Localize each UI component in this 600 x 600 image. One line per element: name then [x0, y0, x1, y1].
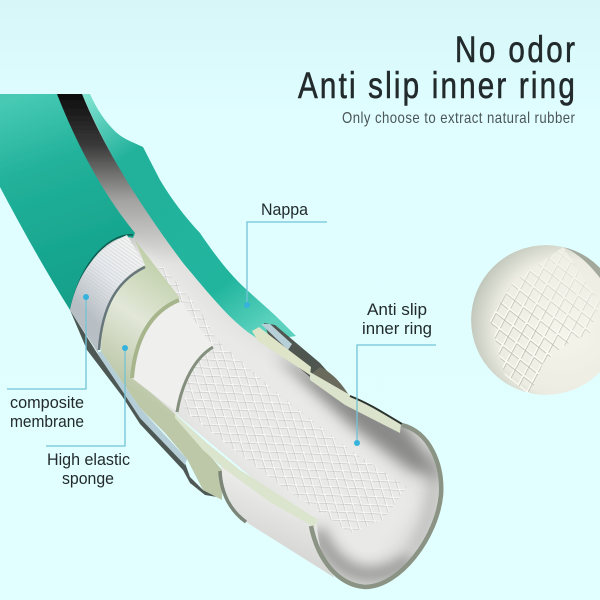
membrane cut rim — [99, 267, 145, 350]
anchor dot — [122, 345, 128, 351]
leader line — [247, 222, 327, 305]
sphere base — [471, 245, 600, 395]
callout: composite membrane — [7, 294, 89, 431]
label line 1: High elastic — [47, 450, 130, 469]
title block — [298, 30, 575, 107]
label line 1: Anti slip — [367, 300, 427, 319]
inner surface shading — [120, 240, 445, 575]
patch highlight fade — [504, 247, 600, 342]
front nappa teal band — [0, 94, 135, 310]
tube inner surface — [57, 94, 440, 585]
anchor dot — [83, 294, 89, 300]
ring cutaway illustration — [0, 94, 445, 587]
pale outer strip — [310, 372, 401, 433]
leader line — [7, 297, 86, 389]
composite membrane layer — [70, 235, 145, 353]
upper layer stack at the cut — [252, 323, 402, 433]
third white layer — [132, 300, 213, 412]
dark upper layer edge — [264, 323, 350, 397]
dark corner of the close-up — [563, 245, 600, 278]
callout: Nappa — [244, 200, 327, 308]
lower shell cut rim — [220, 471, 246, 522]
teal shadow line — [71, 235, 133, 308]
lower pale strip — [175, 414, 318, 527]
callout: High elastic sponge — [46, 345, 130, 488]
title line: Anti slip inner ring: Anti slip inner ring — [298, 66, 575, 107]
high elastic sponge layer — [101, 240, 222, 500]
label line 2: inner ring — [362, 319, 432, 338]
embossed diamond patch — [490, 247, 600, 395]
label line 2: membrane — [10, 412, 84, 431]
detail circle: anti slip texture close-up — [471, 245, 600, 395]
membrane fine lines — [70, 235, 145, 353]
callout: Anti slip inner ring — [354, 300, 436, 446]
end cap rim — [311, 425, 441, 587]
anchor dot — [354, 440, 360, 446]
leader line — [46, 348, 125, 446]
lower blue-grey membrane — [97, 351, 187, 465]
lower shell piece — [221, 464, 335, 578]
thin black line on the strip — [350, 396, 402, 424]
title line: No odor: No odor — [455, 30, 575, 71]
sponge cut rim — [132, 300, 179, 378]
back nappa teal band — [82, 94, 296, 342]
anti slip diamond texture — [150, 263, 407, 533]
label line 2: sponge — [62, 469, 114, 488]
label line 1: composite — [10, 393, 84, 412]
leader line — [357, 345, 436, 443]
blue-grey membrane edge — [261, 324, 292, 350]
inner layer cut rim — [177, 347, 213, 412]
lower dark layers — [70, 310, 217, 497]
subtitle: Only choose to extract natural rubber — [342, 110, 575, 127]
brown-grey layer — [310, 367, 350, 397]
label: Nappa — [261, 200, 308, 219]
pale sponge strip — [252, 327, 311, 375]
anchor dot — [244, 302, 250, 308]
